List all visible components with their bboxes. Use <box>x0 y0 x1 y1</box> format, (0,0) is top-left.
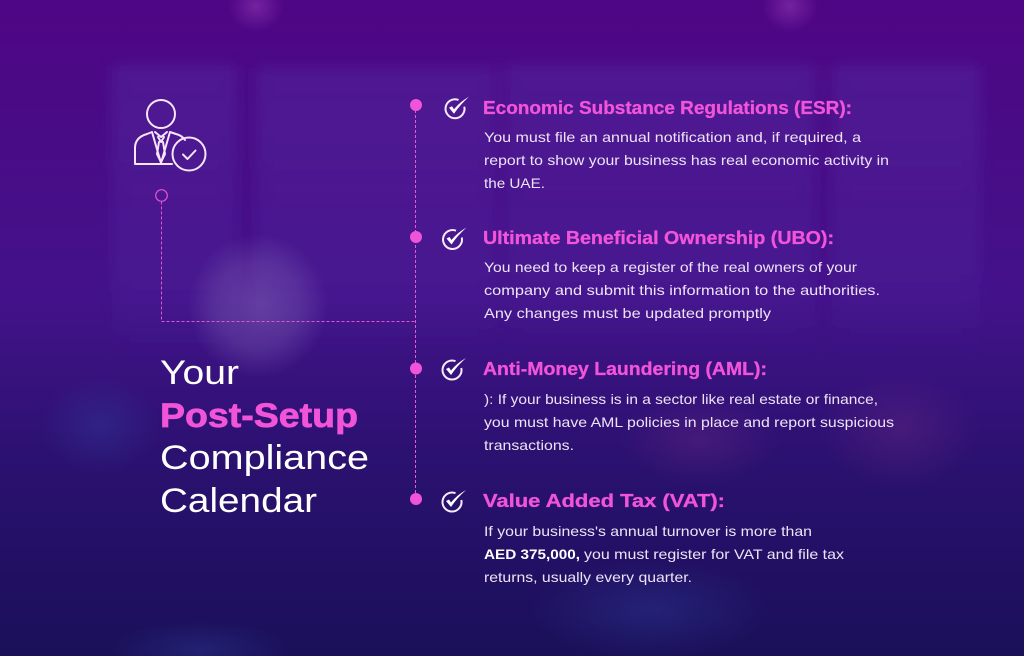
title: Your <box>160 354 239 392</box>
item: AML: ): If your business is in a sector like real estate or finance, <box>484 391 878 407</box>
item: VAT: you must register for VAT and file tax <box>584 546 844 562</box>
item: ESR <box>446 97 889 191</box>
item: UBO: Ultimate Beneficial Ownership (UBO): <box>483 228 834 248</box>
title: Calendar <box>160 482 317 520</box>
item: AML: you must have AML policies in place and report suspicious <box>484 414 894 430</box>
item: VAT: AED 375,000, <box>484 546 580 562</box>
item: UBO: Any changes must be updated promptly <box>484 305 771 321</box>
icon: check mark <box>443 228 466 249</box>
item: UBO: You need to keep a register of the real owners of your <box>484 259 857 275</box>
item: AML: transactions. <box>484 437 574 453</box>
icon: check mark <box>443 490 466 512</box>
timeline: vertical dashed line with dots <box>410 99 422 505</box>
item: ESR: report to show your business has real economic activity in <box>484 152 889 168</box>
item: ESR: You must file an annual notification and, if required, a <box>484 129 861 145</box>
item: VAT <box>443 490 844 585</box>
connector: dashed line from icon to timeline <box>156 190 415 322</box>
item: UBO <box>443 228 880 321</box>
icon: check mark <box>443 358 466 380</box>
item: AML <box>443 358 894 453</box>
item: ESR: Economic Substance Regulations (ESR): <box>483 98 852 118</box>
item: UBO: company and submit this information to the authorities. <box>484 282 880 298</box>
title: Post-Setup <box>160 397 358 435</box>
item: VAT: If your business's annual turnover is more than <box>484 523 812 539</box>
icon: check mark <box>446 97 469 118</box>
item: VAT: Value Added Tax (VAT): <box>483 491 725 511</box>
title <box>160 354 369 520</box>
icon: businessperson with check badge <box>135 100 206 170</box>
title: Compliance <box>160 439 369 477</box>
item: VAT: returns, usually every quarter. <box>484 569 692 585</box>
item: ESR: the UAE. <box>484 175 545 191</box>
item: AML: Anti-Money Laundering (AML): <box>483 359 767 379</box>
